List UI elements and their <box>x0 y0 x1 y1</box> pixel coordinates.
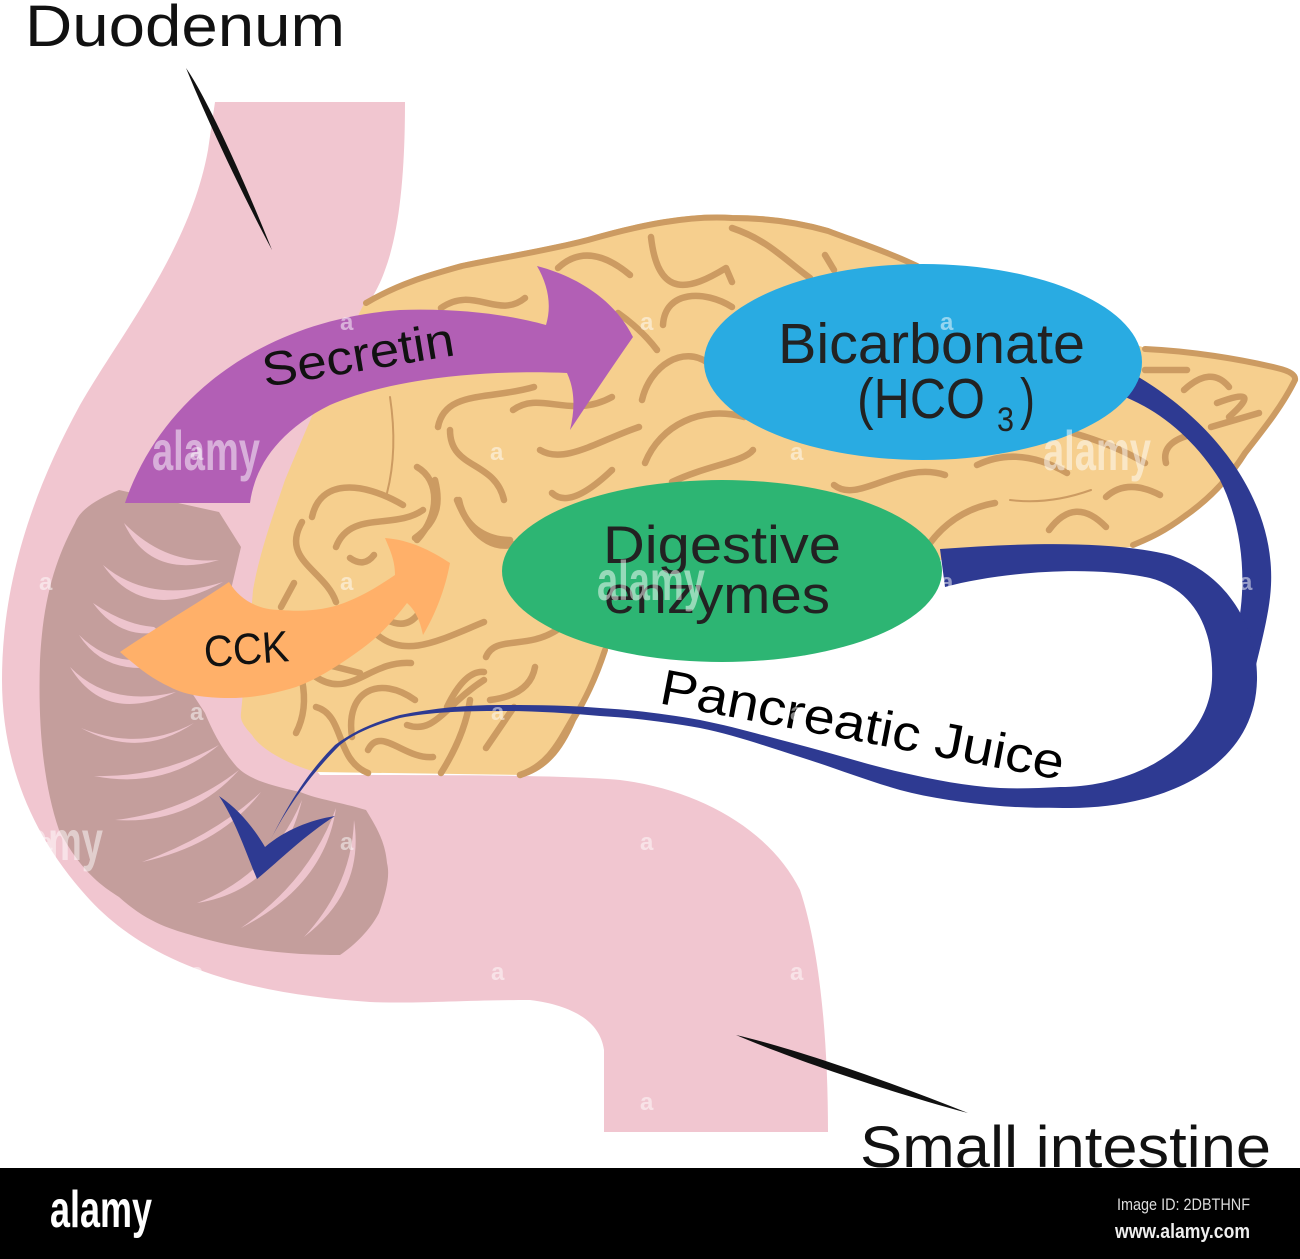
watermarks: a <box>39 829 53 856</box>
secretin arrow <box>125 266 633 503</box>
watermarks: a <box>190 959 204 986</box>
watermarks: a <box>340 569 354 596</box>
enzymes label: enzymes <box>604 566 830 625</box>
duodenum inner wall <box>40 490 388 955</box>
watermarks: a <box>490 439 504 466</box>
CCK arrow <box>120 538 450 698</box>
image id: Image ID: 2DBTHNF <box>1117 1195 1250 1214</box>
pancreatic duct <box>219 372 1271 879</box>
pancreas lobule texture <box>281 228 1259 775</box>
watermarks: a <box>190 699 204 726</box>
watermarks: a <box>640 309 654 336</box>
watermarks: alamy <box>597 549 705 612</box>
small intestine label: Small intestine <box>860 1115 1271 1180</box>
CCK label: CCK <box>202 622 290 677</box>
footer bar <box>0 1168 1300 1259</box>
watermarks: a <box>39 569 53 596</box>
duct outlet arrowhead <box>219 796 335 879</box>
footer logo: alamy <box>50 1181 152 1239</box>
website: www.alamy.com <box>1114 1221 1250 1243</box>
watermarks: a <box>790 959 804 986</box>
duodenum pointer <box>186 68 272 250</box>
digestive label: Digestive <box>603 516 841 575</box>
formula label: ) <box>1020 367 1035 431</box>
pancreas <box>241 214 1298 775</box>
formula label: (HCO <box>857 367 985 431</box>
inner wall folds <box>70 523 356 937</box>
pancreas outline <box>366 217 1295 775</box>
watermarks: a <box>940 569 954 596</box>
secretin label: Secretin <box>258 314 458 398</box>
watermarks: a <box>1239 569 1253 596</box>
watermarks: a <box>640 829 654 856</box>
watermarks: alamy <box>1043 419 1151 482</box>
watermarks: a <box>340 1089 354 1116</box>
watermarks: a <box>340 829 354 856</box>
watermarks: a <box>491 959 505 986</box>
watermarks: a <box>790 699 804 726</box>
watermarks: a <box>190 439 204 466</box>
watermarks <box>0 309 1253 1116</box>
bicarbonate label: Bicarbonate <box>778 312 1085 376</box>
watermarks: alamy <box>152 419 260 482</box>
digestive enzymes ellipse <box>502 480 942 662</box>
pancreatic juice label: Pancreatic Juice <box>656 659 1069 791</box>
watermarks: a <box>340 309 354 336</box>
watermarks: a <box>940 309 954 336</box>
formula label: 3 <box>997 401 1014 439</box>
bicarbonate ellipse <box>704 264 1142 460</box>
duodenum and small intestine <box>2 102 828 1132</box>
watermarks: a <box>491 699 505 726</box>
small intestine pointer <box>736 1035 968 1113</box>
watermarks: a <box>640 1089 654 1116</box>
watermarks: a <box>790 439 804 466</box>
